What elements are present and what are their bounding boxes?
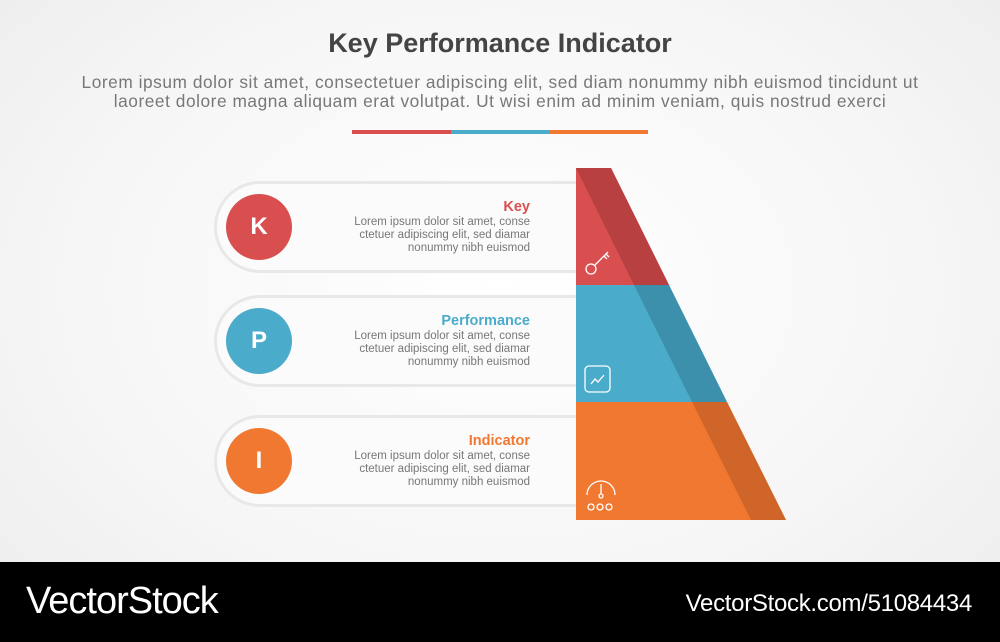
- text key: ctetuer adipiscing elit, sed diamar: [359, 229, 530, 241]
- circle P: [226, 308, 292, 374]
- text indicator: Lorem ipsum dolor sit amet, conse: [354, 450, 530, 462]
- title: Key Performance Indicator: [328, 28, 672, 58]
- text key: nonummy nibh euismod: [408, 242, 530, 254]
- circle P: P: [251, 327, 267, 354]
- subtitle: [82, 72, 918, 111]
- subtitle: laoreet dolore magna aliquam erat volutpat. Ut wisi enim ad minim veniam, quis nostrud exerci: [114, 91, 886, 111]
- text performance: nonummy nibh euismod: [408, 356, 530, 368]
- icon: key: [586, 252, 609, 274]
- text key: Key: [503, 199, 530, 215]
- text performance: Performance: [441, 313, 530, 329]
- footer logo: VectorStock: [26, 580, 218, 622]
- text indicator: Indicator: [469, 433, 530, 449]
- circle I: [226, 428, 292, 494]
- text key: [354, 199, 530, 254]
- color divider: [352, 130, 648, 134]
- panel: performance: [214, 295, 614, 387]
- text indicator: [354, 433, 530, 488]
- subtitle: Lorem ipsum dolor sit amet, consectetuer adipiscing elit, sed diam nonummy nibh euismod tincidunt ut: [82, 72, 918, 92]
- panel: indicator: [214, 415, 614, 507]
- circle K: K: [250, 213, 268, 240]
- footer url: VectorStock.com/51084434: [686, 590, 972, 617]
- text performance: Lorem ipsum dolor sit amet, conse: [354, 330, 530, 342]
- icon: chart: [585, 366, 610, 392]
- footer: [0, 562, 1000, 642]
- text indicator: nonummy nibh euismod: [408, 476, 530, 488]
- circle K: [226, 194, 292, 260]
- text performance: ctetuer adipiscing elit, sed diamar: [359, 343, 530, 355]
- icon: gauge: [587, 481, 615, 510]
- text performance: [354, 313, 530, 368]
- circle I: I: [256, 447, 262, 474]
- panel: key: [214, 181, 614, 273]
- text key: Lorem ipsum dolor sit amet, conse: [354, 216, 530, 228]
- text indicator: ctetuer adipiscing elit, sed diamar: [359, 463, 530, 475]
